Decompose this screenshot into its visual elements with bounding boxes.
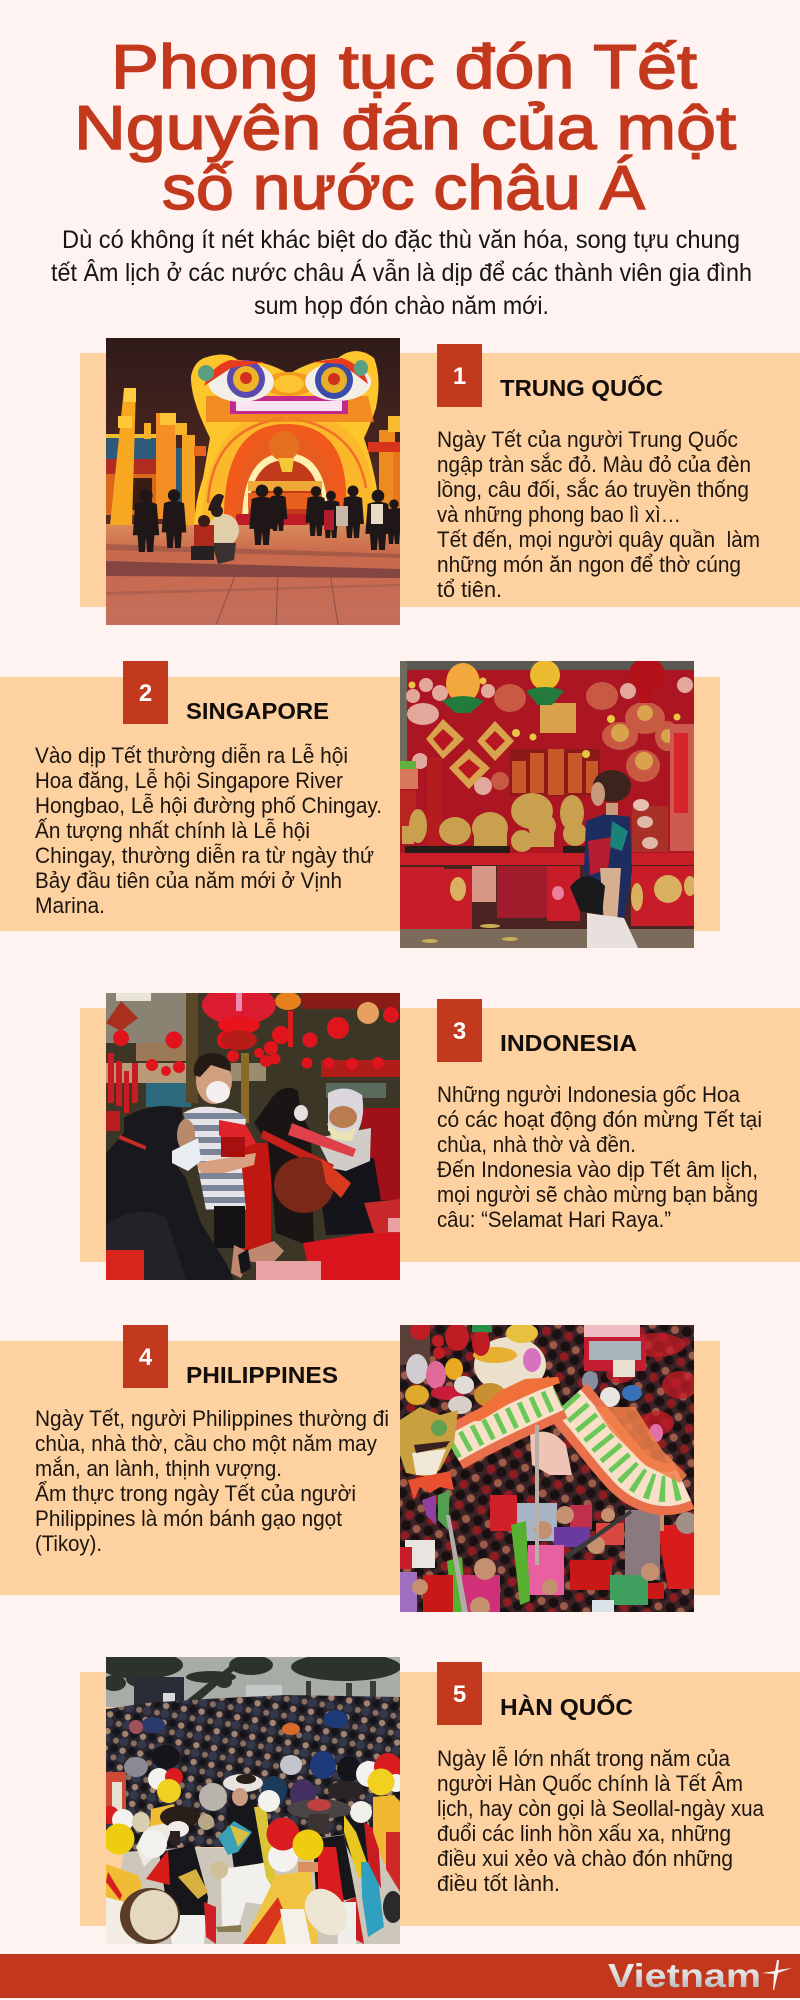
- text block: Ngày Tết của người Trung Quốc: [437, 427, 738, 452]
- text block: mắn, an lành, thịnh vượng.: [35, 1456, 282, 1481]
- text block: [35, 1406, 389, 1556]
- number badge: 5: [453, 1681, 466, 1708]
- text block: lồng, câu đối, sắc áo truyền thống: [437, 477, 749, 502]
- text block: Vào dịp Tết thường diễn ra Lễ hội: [35, 743, 348, 768]
- number badge: 2: [139, 680, 152, 707]
- red cloth: [239, 1143, 271, 1253]
- panel: Hàn Quốc: [80, 1651, 800, 1944]
- text block: Hongbao, Lễ hội đường phố Chingay.: [35, 793, 382, 818]
- dragon body: [530, 1432, 572, 1475]
- text block: câu: “Selamat Hari Raya.”: [437, 1207, 671, 1232]
- number badge: [437, 1662, 482, 1725]
- panel background: [80, 1672, 800, 1926]
- middle woman: [254, 1088, 314, 1248]
- pompom hats: [101, 1753, 405, 1872]
- text block: ngập tràn sắc đỏ. Màu đỏ của đèn: [437, 452, 751, 477]
- right woman: [321, 1158, 381, 1235]
- number badge: [123, 1325, 168, 1388]
- text block: Marina.: [35, 893, 105, 918]
- title: [74, 33, 736, 223]
- wall ornaments: [406, 677, 693, 795]
- text block: người Hàn Quốc chính là Tết Âm: [437, 1771, 743, 1796]
- text block: [437, 427, 760, 602]
- footer band with logo: [0, 1954, 800, 1998]
- drums: [120, 1812, 403, 1944]
- text block: [437, 1746, 765, 1896]
- counter: [400, 853, 694, 865]
- text block: điều xui xẻo và chào đón những: [437, 1846, 733, 1871]
- heading: PHILIPPINES: [186, 1362, 338, 1388]
- visitors: [133, 485, 403, 552]
- number badge: 1: [453, 363, 466, 390]
- logo: Vietnam+: Vietnam: [608, 1957, 761, 1994]
- right columns: [379, 430, 395, 510]
- dragon head: [400, 1407, 458, 1477]
- text block: Những người Indonesia gốc Hoa: [437, 1082, 741, 1107]
- text block: Chingay, thường diễn ra từ ngày thứ: [35, 843, 374, 868]
- photo: lion lantern gate: [106, 338, 400, 625]
- text block: Hoa đăng, Lễ hội Singapore River: [35, 768, 343, 793]
- intro text: sum họp đón chào năm mới.: [254, 292, 549, 320]
- number badge: 4: [139, 1344, 153, 1371]
- panel: Philippines: [0, 1322, 720, 1617]
- float truck: [584, 1337, 646, 1371]
- text block: chùa, nhà thờ và đền.: [437, 1132, 636, 1157]
- text block: [437, 1082, 762, 1232]
- panel background: [0, 677, 720, 931]
- text block: [35, 743, 382, 918]
- lion head: [191, 351, 379, 524]
- red packets: [303, 1233, 400, 1280]
- logo: Vietnam+: [608, 1957, 792, 1994]
- text block: Ẩm thực trong ngày Tết của người: [35, 1481, 356, 1506]
- text block: điều tốt lành.: [437, 1871, 560, 1896]
- heading: SINGAPORE: [186, 698, 329, 724]
- title: Nguyên đán của một: [74, 94, 736, 163]
- text block: đuổi các linh hồn xấu xa, những: [437, 1821, 731, 1846]
- text block: những món ăn ngon để thờ cúng: [437, 552, 741, 577]
- photo: farmers dance performance: [106, 1657, 400, 1944]
- left pavilion: [106, 458, 161, 515]
- audience: [106, 1695, 400, 1857]
- text block: Ấn tượng nhất chính là Lễ hội: [35, 818, 310, 843]
- photo: people shopping among red lanterns: [106, 993, 400, 1280]
- number badge: [437, 344, 482, 407]
- intro text: [51, 226, 752, 320]
- intro text: Dù có không ít nét khác biệt do đặc thù văn hóa, song tựu chung: [62, 226, 740, 254]
- panel: Indonesia: [80, 985, 800, 1280]
- title: Phong tục đón Tết: [111, 33, 697, 102]
- text block: Tết đến, mọi người quây quần làm: [437, 527, 760, 552]
- panel background: [80, 353, 800, 607]
- man: [183, 1106, 246, 1210]
- panel background: [80, 1008, 800, 1262]
- text block: lịch, hay còn gọi là Seollal-ngày xua: [437, 1796, 765, 1821]
- intro text: tết Âm lịch ở các nước châu Á vẫn là dịp để các thành viên gia đình: [51, 258, 752, 287]
- banners and fan: [288, 1123, 356, 1157]
- heading: INDONESIA: [500, 1030, 637, 1056]
- text block: có các hoạt động đón mừng Tết tại: [437, 1107, 762, 1132]
- eyes: [263, 372, 315, 396]
- lanterns: [113, 1007, 399, 1076]
- balloons and decoration: [400, 1325, 430, 1365]
- heading: HÀN QUỐC: [500, 1693, 633, 1720]
- poles: [535, 1425, 539, 1565]
- text block: chùa, nhà thờ, cầu cho một năm may: [35, 1431, 377, 1456]
- panel: Trung Quốc: [80, 338, 800, 625]
- photo: red decorations stall: [400, 661, 694, 948]
- dancers: [106, 1772, 400, 1944]
- text block: Bảy đầu tiên của năm mới ở Vịnh: [35, 868, 342, 893]
- text block: Philippines là món bánh gạo ngọt: [35, 1506, 342, 1531]
- heading: TRUNG QUỐC: [500, 374, 663, 401]
- number badge: 3: [453, 1018, 466, 1045]
- number badge: [123, 661, 168, 724]
- brow band and lights: [206, 396, 374, 422]
- title: số nước châu Á: [162, 154, 646, 223]
- pineapples and lantern: [446, 663, 480, 703]
- gold statues: [402, 793, 587, 852]
- text block: Ngày lễ lớn nhất trong năm của: [437, 1746, 731, 1771]
- photo: dragon dance in crowd: [400, 1325, 694, 1612]
- woman: [584, 814, 632, 918]
- text block: Ngày Tết, người Philippines thường đi: [35, 1406, 389, 1431]
- number badge: [437, 999, 482, 1062]
- left woman: [106, 1106, 234, 1280]
- text block: tổ tiên.: [437, 577, 502, 602]
- text block: và những phong bao lì xì…: [437, 502, 681, 527]
- panel: Singapore: [0, 658, 720, 948]
- text block: mọi người sẽ chào mừng bạn bằng: [437, 1182, 758, 1207]
- panel background: [0, 1341, 720, 1595]
- text block: Đến Indonesia vào dịp Tết âm lịch,: [437, 1157, 758, 1182]
- ground: [106, 1827, 400, 1944]
- text block: (Tikoy).: [35, 1531, 102, 1556]
- coloured clothes in crowd: [606, 1333, 698, 1435]
- ground: [400, 929, 694, 948]
